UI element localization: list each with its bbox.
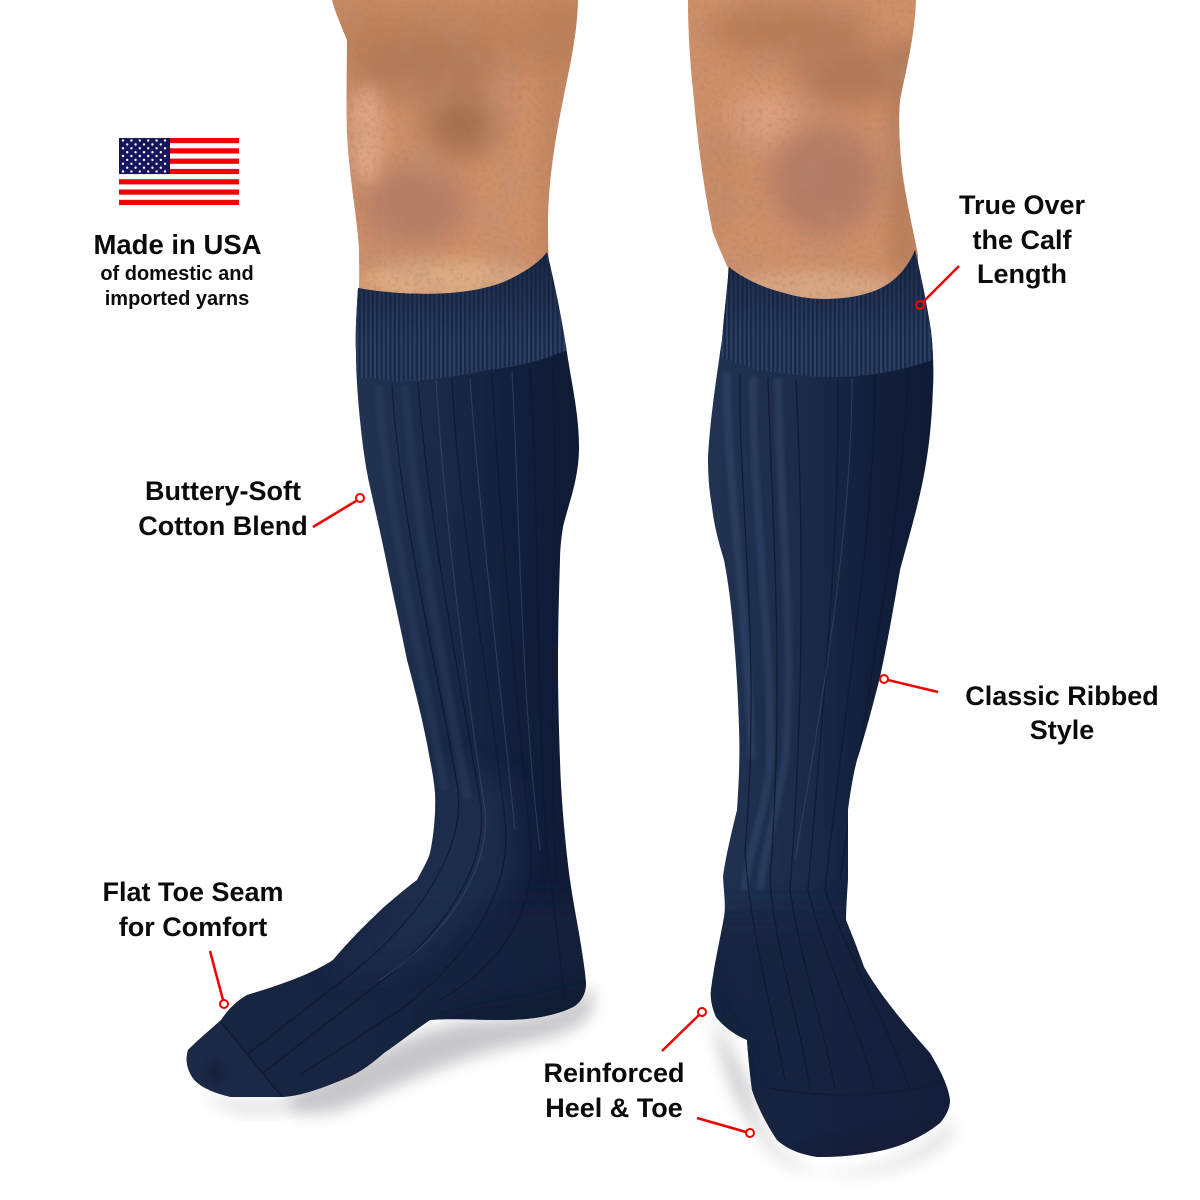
American flag icon	[119, 138, 239, 205]
callout: buttery-soft cotton blend: Cotton Blend	[138, 511, 308, 541]
right toe reinforcement	[770, 1080, 945, 1165]
right sock ribs	[727, 368, 910, 1090]
left toe reinforcement	[186, 1020, 284, 1100]
callout: true over the calf length: the Calf	[972, 225, 1073, 255]
callout: classic ribbed style: Classic Ribbed	[965, 681, 1159, 711]
floor shadows	[200, 985, 955, 1174]
callout: flat toe seam for comfort: Flat Toe Seam	[102, 877, 284, 907]
callout: reinforced heel and toe	[543, 1008, 754, 1137]
right sock cuff	[717, 250, 935, 377]
callout: true over the calf length: True Over	[959, 190, 1086, 220]
left sock cuff	[350, 252, 567, 382]
left sock ribs	[240, 360, 565, 1075]
callout: buttery-soft cotton blend: Buttery-Soft	[145, 476, 301, 506]
left foot tone	[186, 764, 586, 1097]
text: made in USA: Made in USA	[93, 229, 262, 260]
callout: flat toe seam for comfort	[102, 877, 284, 1008]
callout: classic ribbed style	[880, 675, 1159, 745]
callout: buttery-soft cotton blend	[138, 476, 364, 541]
right sock	[708, 250, 950, 1157]
callout: true over the calf length: Length	[977, 259, 1067, 289]
text: made in USA: imported yarns	[105, 288, 249, 310]
callout: flat toe seam for comfort: for Comfort	[119, 912, 267, 942]
left leg skin	[332, 0, 578, 294]
right leg skin	[685, 0, 925, 310]
text: made in USA: of domestic and	[100, 263, 254, 285]
callout: reinforced heel and toe: Reinforced	[543, 1058, 685, 1088]
callout: reinforced heel and toe: Heel & Toe	[545, 1093, 683, 1123]
callout: classic ribbed style: Style	[1030, 715, 1094, 745]
left sock	[186, 252, 586, 1097]
right foot tone	[710, 898, 950, 1157]
text: made in USA	[93, 229, 262, 310]
callout: true over the calf length	[916, 190, 1086, 309]
